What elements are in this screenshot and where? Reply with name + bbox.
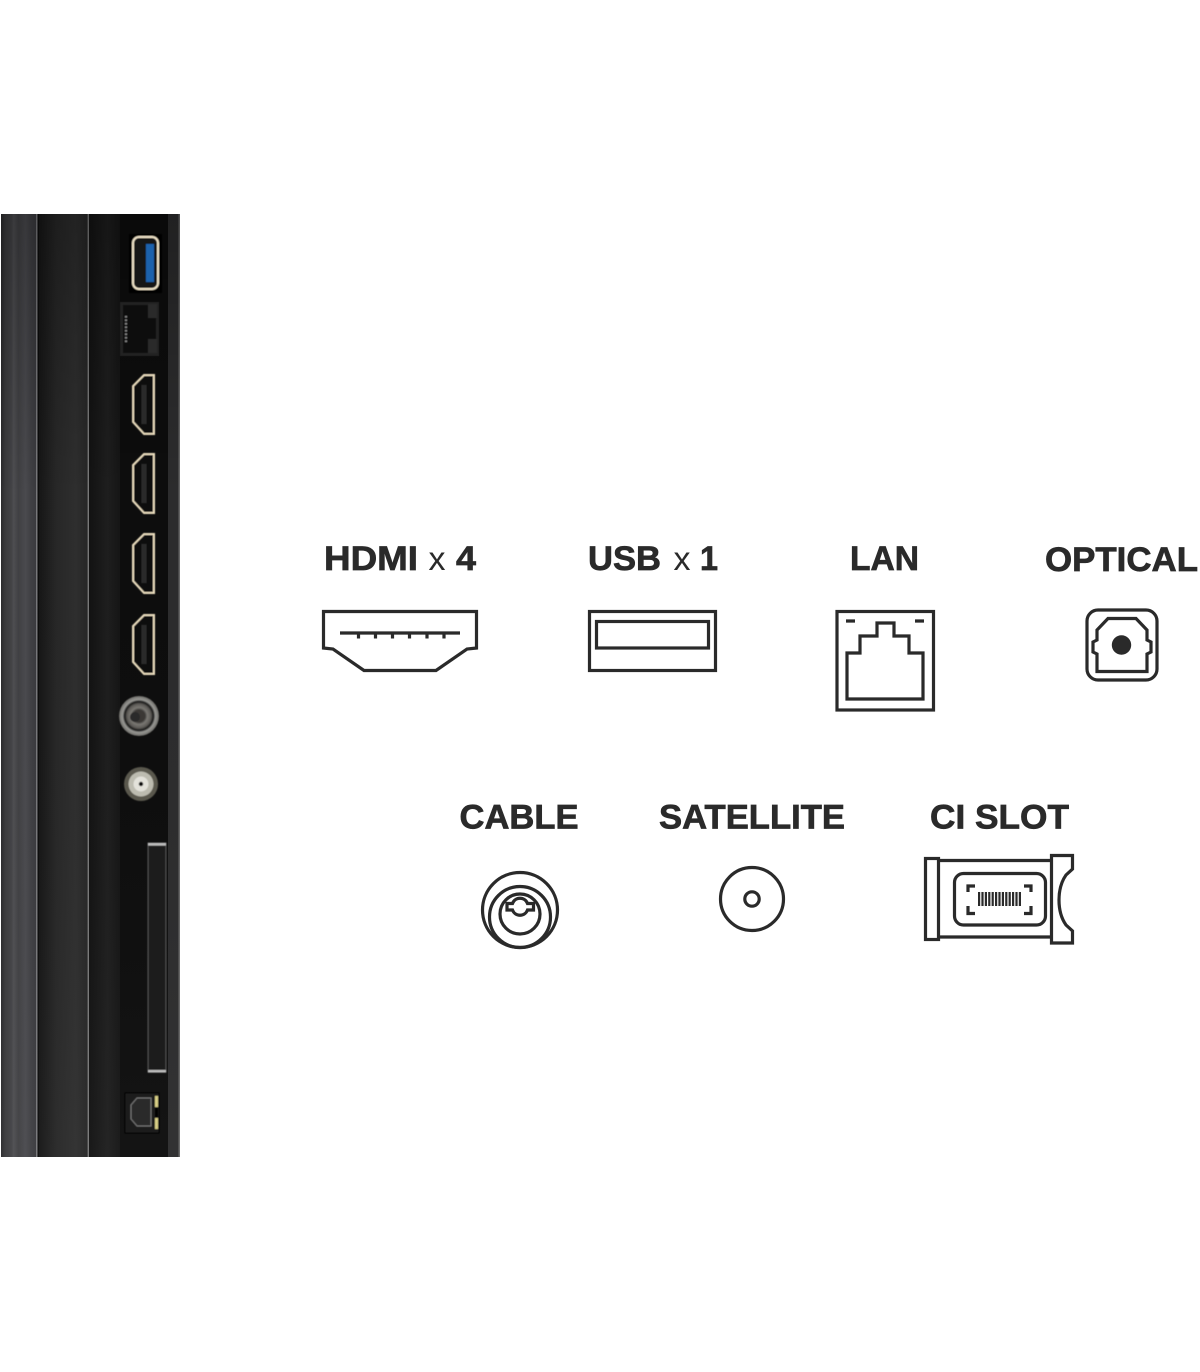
label: OPTICAL: OPTICAL: [1045, 541, 1198, 579]
label: HDMI x 4: x: [428, 540, 446, 577]
port: HDMI 3: [133, 534, 154, 593]
icon: USB: [590, 612, 716, 670]
label: CABLE: CABLE: [460, 798, 578, 836]
panel: TV rear side photo: [1, 214, 180, 1157]
port: LAN: [120, 302, 159, 356]
port: HDMI 4: [133, 615, 154, 674]
label: USB x 1: USB: [588, 540, 661, 578]
label: SATELLITE: SATELLITE: [659, 798, 845, 836]
label: USB x 1: 1: [700, 540, 718, 578]
icon: optical: [1087, 610, 1157, 680]
label: USB x 1: x: [674, 540, 691, 577]
port: cable connector: [119, 696, 159, 736]
port: optical: [125, 1093, 159, 1133]
port: CI slot: [148, 843, 166, 1073]
icon: CI slot: [926, 856, 1072, 943]
label: HDMI x 4: 4: [456, 540, 476, 578]
label: HDMI x 4: HDMI: [324, 540, 418, 578]
port: USB: [129, 234, 162, 293]
port: HDMI 2: [133, 454, 154, 513]
icon: cable: [482, 872, 558, 948]
label: USB x 1: [588, 540, 718, 578]
icon: satellite: [720, 868, 784, 930]
port: HDMI 1: [133, 375, 154, 434]
label: LAN: LAN: [850, 540, 919, 578]
port: satellite connector: [124, 767, 158, 801]
label: CI SLOT: CI SLOT: [930, 798, 1069, 836]
label: HDMI x 4: [324, 540, 476, 578]
icon: LAN: [837, 612, 934, 710]
icon: HDMI: [324, 612, 476, 670]
